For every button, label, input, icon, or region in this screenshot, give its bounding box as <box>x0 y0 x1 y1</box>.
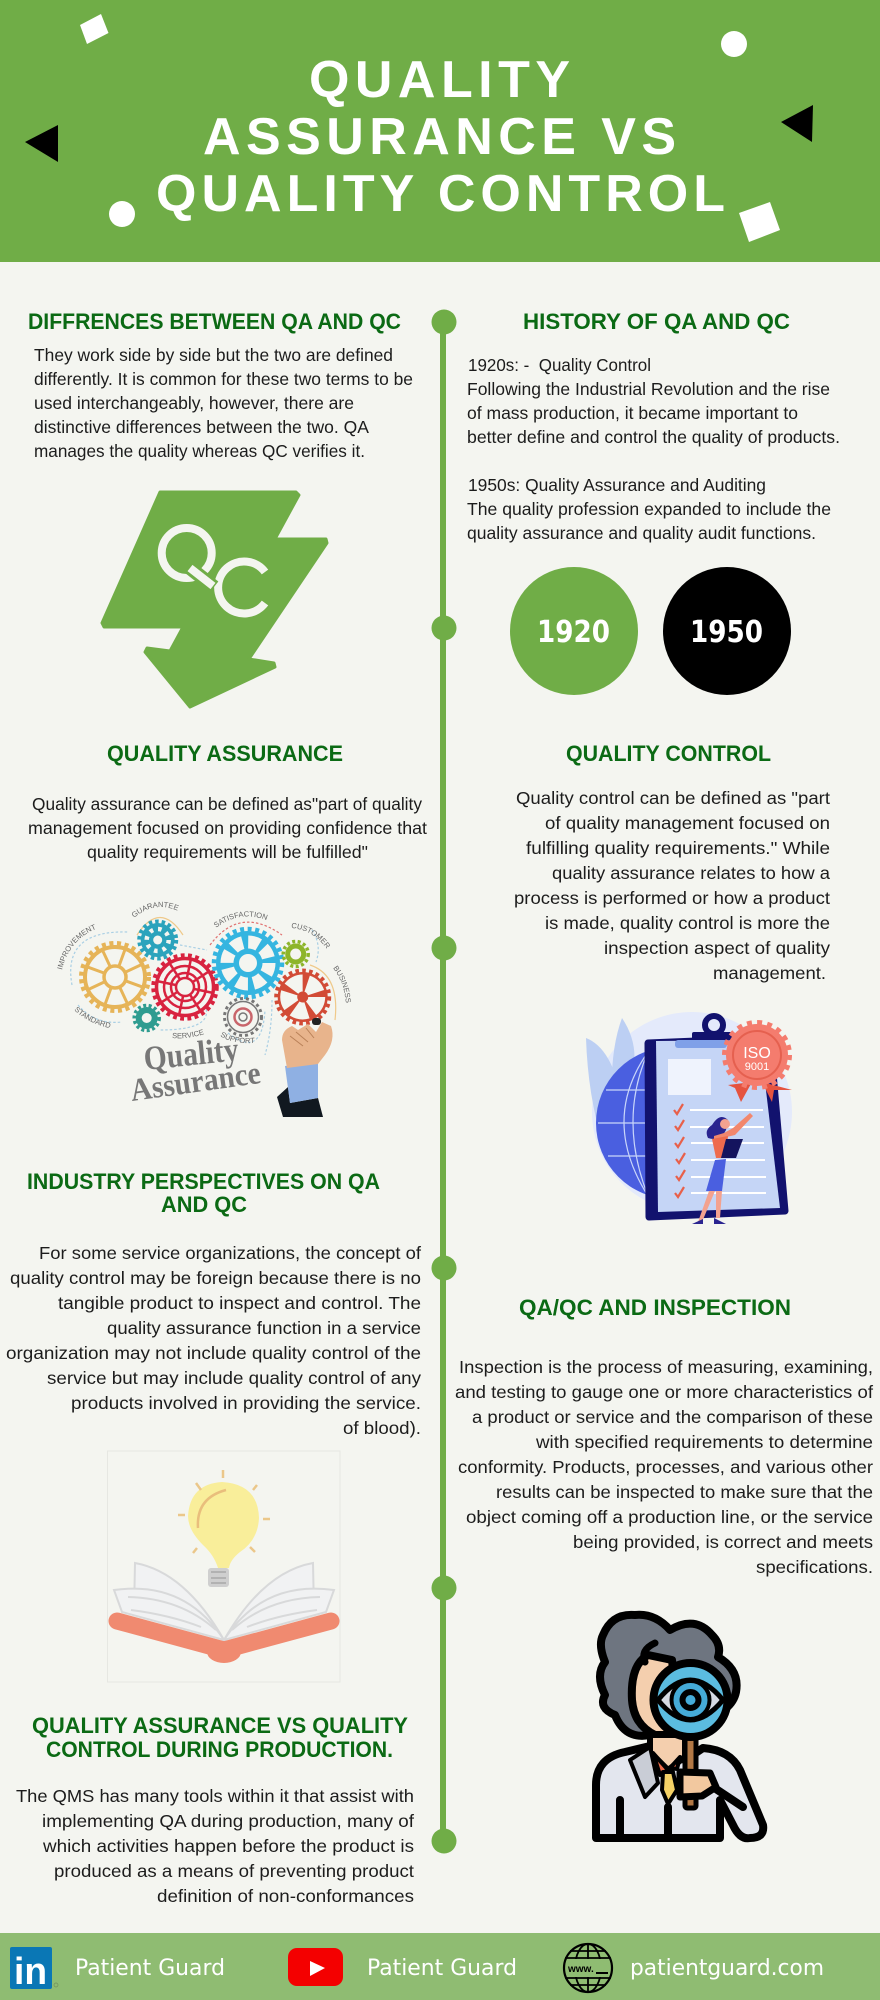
icon: LinkedIn <box>10 1947 58 1993</box>
text block: organization may not include quality control of the <box>6 1343 421 1363</box>
text block: products involved in providing the service. <box>71 1393 421 1413</box>
text block: Quality control can be defined as "part <box>516 788 830 808</box>
heading <box>27 1169 380 1217</box>
text: YouTube name: Patient Guard <box>367 1956 517 1981</box>
text block: implementing QA during production, many of <box>42 1811 414 1831</box>
gear labels: SUPPORT <box>220 1032 254 1044</box>
badge: ISO 9001: 9001 <box>745 1061 769 1073</box>
handle <box>685 1738 696 1808</box>
gear labels: GUARANTEE <box>132 902 179 917</box>
text block: The quality profession expanded to include the <box>467 499 831 519</box>
footer bar <box>0 1933 880 2000</box>
gear labels: BUSINESS <box>333 966 351 1003</box>
magnifying lens <box>654 1663 728 1737</box>
panel: QA vs QC during production <box>16 1713 414 1906</box>
text block: is made, quality control is more the <box>545 913 830 933</box>
text: website: patientguard.com <box>630 1956 824 1981</box>
text block: used interchangeably, however, there are <box>34 393 354 413</box>
text block: object coming off a production line, or the service <box>466 1507 873 1527</box>
checklist <box>674 1104 766 1197</box>
lettering: Quality Assurance <box>128 1031 263 1108</box>
text block: of blood). <box>343 1418 421 1438</box>
text block: management focused on providing confidence that <box>28 818 427 838</box>
gear labels: SERVICE <box>172 1029 204 1038</box>
text block: They work side by side but the two are defined <box>34 345 393 365</box>
title: QUALITY CONTROL <box>156 165 725 223</box>
heading: QUALITY ASSURANCE VS QUALITY <box>32 1713 408 1738</box>
text block: quality assurance function in a service <box>107 1318 421 1338</box>
text block <box>6 1243 421 1438</box>
panel: differences between QA and QC <box>28 309 413 707</box>
coat lines <box>620 1787 743 1838</box>
text block: produced as a means of preventing product <box>54 1861 414 1881</box>
icon: website globe <box>564 1944 612 1992</box>
text block: results can be inspected to make sure that the <box>496 1482 873 1502</box>
lettering: Quality Assurance: Quality <box>142 1031 240 1078</box>
text block: manages the quality whereas QC verifies it. <box>34 441 365 461</box>
text block: of quality management focused on <box>545 813 830 833</box>
icon: black triangle left <box>25 125 58 162</box>
heading <box>32 1713 408 1762</box>
text block: specifications. <box>756 1557 873 1577</box>
icon: YouTube <box>288 1948 343 1986</box>
text block <box>28 794 427 862</box>
hair <box>600 1615 737 1736</box>
text block: better define and control the quality of products. <box>467 427 840 447</box>
text block: differently. It is common for these two terms to be <box>34 369 413 389</box>
panel: QA/QC and inspection <box>455 1295 873 1838</box>
text block <box>467 355 840 543</box>
heading: INDUSTRY PERSPECTIVES ON QA <box>27 1169 380 1194</box>
text block: Following the Industrial Revolution and the rise <box>467 379 830 399</box>
badge: ISO 9001: ISO <box>743 1045 771 1062</box>
text block: which activities happen before the product is <box>42 1836 414 1856</box>
heading: QUALITY CONTROL <box>566 741 771 766</box>
icon: white diamond bottom right <box>739 202 780 242</box>
gear labels: CUSTOMER <box>292 923 330 948</box>
panel: history of QA and QC <box>467 309 840 695</box>
timeline <box>432 310 456 1854</box>
text block: Inspection is the process of measuring, examining, <box>459 1357 873 1377</box>
text block: process is performed or how a product <box>514 888 830 908</box>
gear: yellow <box>78 940 152 1014</box>
badge: 1920 <box>510 567 638 695</box>
gear: teal bottom <box>134 1006 159 1030</box>
text block: quality control may be foreign because there is no <box>10 1268 421 1288</box>
illustration: hand holding pen <box>277 1018 333 1117</box>
text block: quality assurance and quality audit functions. <box>467 523 816 543</box>
face <box>632 1655 680 1735</box>
text block: The QMS has many tools within it that assist with <box>16 1786 414 1806</box>
illustration: book and light bulb <box>108 1451 340 1682</box>
icon: white diamond top left <box>80 14 108 44</box>
text block: 1950s: Quality Assurance and Auditing <box>468 475 766 495</box>
text block: and testing to gauge one or more characteristics of <box>455 1382 873 1402</box>
panel: header banner <box>0 0 880 262</box>
gear: red orange <box>276 970 329 1024</box>
lettering: Quality Assurance: Assurance <box>128 1054 263 1108</box>
text block: fulfilling quality requirements." While <box>526 838 830 858</box>
icon: black triangle right <box>781 105 813 142</box>
text block: Quality assurance can be defined as"part of quality <box>32 794 422 814</box>
hand <box>680 1772 716 1797</box>
heading: DIFFRENCES BETWEEN QA AND QC <box>28 309 401 334</box>
title: QUALITY <box>309 51 570 109</box>
gear: blue <box>214 929 282 997</box>
illustration: ISO 9001 clipboard <box>586 1012 792 1224</box>
text block: 1920s: - Quality Control <box>468 355 651 375</box>
gear labels: SATISFACTION <box>214 911 268 928</box>
icon: white circle bottom left <box>109 201 135 227</box>
panel: quality control <box>514 741 830 1224</box>
heading: QUALITY ASSURANCE <box>107 741 343 766</box>
title: ASSURANCE VS <box>203 108 676 166</box>
text block: with specified requirements to determine <box>535 1432 873 1452</box>
gear: teal top <box>139 922 176 958</box>
text block: a product or service and the comparison of these <box>472 1407 873 1427</box>
icon: QC lightning bolt <box>102 492 327 707</box>
text block: conformity. Products, processes, and various other <box>458 1457 873 1477</box>
title <box>156 51 725 223</box>
gear labels: STANDARD <box>74 1007 110 1028</box>
icon: website globe: www. <box>567 1964 594 1975</box>
text block: service but may include quality control of any <box>47 1368 421 1388</box>
neck <box>650 1735 685 1770</box>
book cover <box>117 1621 331 1663</box>
panel: quality assurance <box>28 741 427 1117</box>
text block <box>16 1786 414 1906</box>
badge: ISO 9001 <box>724 1022 792 1102</box>
shirt and tie <box>630 1747 680 1804</box>
badge: 1950: 1950 <box>690 615 763 650</box>
heading: HISTORY OF QA AND QC <box>523 309 790 334</box>
text block <box>34 345 413 461</box>
gear labels: IMPROVEMENT <box>57 924 95 970</box>
text block: management. <box>713 963 826 983</box>
text block: tangible product to inspect and control. The <box>58 1293 421 1313</box>
coat <box>596 1746 763 1838</box>
text block: being provided, is correct and meets <box>573 1532 873 1552</box>
text: LinkedIn name: Patient Guard <box>75 1956 225 1981</box>
heading: CONTROL DURING PRODUCTION. <box>46 1737 393 1762</box>
book pages <box>114 1563 334 1640</box>
icon: white circle top right <box>721 31 747 57</box>
icon: LinkedIn: in <box>14 1951 47 1993</box>
text block: distinctive differences between the two. QA <box>34 417 369 437</box>
illustration: quality assurance gears and hand <box>57 902 351 1117</box>
text block: quality requirements will be fulfilled" <box>87 842 368 862</box>
gear labels <box>57 902 351 1044</box>
panel: industry perspectives <box>6 1169 421 1682</box>
bulb <box>178 1470 270 1587</box>
gear: red <box>151 953 219 1021</box>
badge: 1920: 1920 <box>537 615 610 650</box>
gear: green <box>283 942 308 966</box>
heading: AND QC <box>161 1192 247 1217</box>
text block: For some service organizations, the concept of <box>39 1243 421 1263</box>
gear: grey support <box>224 998 262 1036</box>
badge: 1950 <box>663 567 791 695</box>
text block <box>455 1357 873 1577</box>
text block: definition of non-conformances <box>157 1886 414 1906</box>
text block: of mass production, it became important to <box>467 403 798 423</box>
heading: QA/QC AND INSPECTION <box>519 1295 791 1320</box>
woman figure <box>692 1113 753 1224</box>
illustration: inspector with magnifying glass <box>596 1615 763 1838</box>
text block <box>514 788 830 983</box>
text block: quality assurance relates to how a <box>552 863 830 883</box>
text block: inspection aspect of quality <box>604 938 830 958</box>
